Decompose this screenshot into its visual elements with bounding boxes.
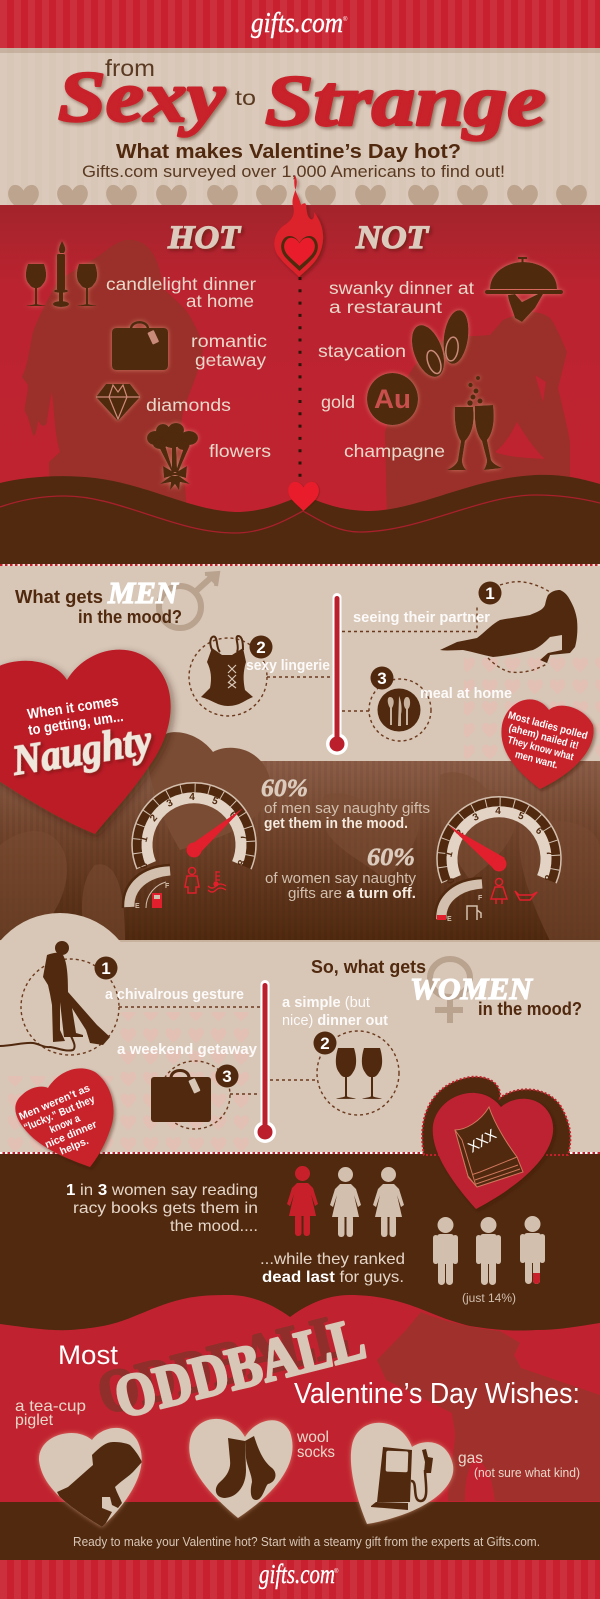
footer logo: ® xyxy=(334,1568,339,1575)
number 3 xyxy=(370,666,394,690)
heading: so what gets: So, what gets xyxy=(311,957,426,977)
pattern hearts xyxy=(464,650,600,761)
heart: socks xyxy=(189,1419,293,1518)
red field xyxy=(0,1295,600,1502)
title xyxy=(58,55,546,141)
icon: flowers xyxy=(147,423,198,490)
note: (not sure what kind) xyxy=(474,1466,580,1480)
title: to xyxy=(235,87,256,110)
small fuel gauge: E xyxy=(135,903,140,910)
icon: slippers xyxy=(406,309,472,381)
heart: piglet xyxy=(39,1428,142,1530)
text: women say: of women say naughty xyxy=(265,870,416,887)
number 3: 3 xyxy=(377,669,387,688)
text: racy books: racy books gets them in xyxy=(73,1200,258,1217)
icon: woman xyxy=(491,878,507,904)
text: men say: of men say naughty gifts xyxy=(264,800,430,817)
icon: man with dog xyxy=(0,941,119,1055)
icon: suitcase xyxy=(151,1061,230,1129)
label: gas xyxy=(458,1450,580,1480)
small fuel gauge: E xyxy=(447,916,452,923)
silhouette: woman profile xyxy=(377,1312,600,1501)
figure: tan woman xyxy=(330,1167,361,1237)
text: the mood: the mood.... xyxy=(170,1218,258,1235)
label: staycation: staycation xyxy=(318,341,406,361)
gauge: women: 2 xyxy=(454,827,466,839)
small fuel gauge xyxy=(435,878,483,923)
needle xyxy=(189,808,243,854)
icon: flame heart xyxy=(274,175,323,277)
callout line 4: nice dinner xyxy=(43,1118,99,1151)
gauge numerals: 0 xyxy=(445,876,458,885)
connector lines xyxy=(119,1007,317,1094)
label: simple dinner: a simple (but xyxy=(282,994,371,1011)
gauge: men: 7 xyxy=(237,833,250,842)
number 1: 1 xyxy=(485,584,495,603)
dotted divider xyxy=(298,277,302,478)
label: tea-cup piglet xyxy=(15,1398,86,1429)
pattern hearts xyxy=(116,1012,252,1153)
row of hearts xyxy=(8,185,587,214)
label: gas: gas xyxy=(458,1450,483,1467)
title: from xyxy=(105,55,155,81)
icon: male symbol xyxy=(159,573,218,628)
text: just 14 percent: (just 14%) xyxy=(462,1293,516,1305)
label: seeing their partner: seeing their partner xyxy=(353,609,490,626)
title: Sexy xyxy=(58,57,226,137)
gauge: men: 2 xyxy=(148,812,160,824)
icon: reclining woman xyxy=(440,590,577,663)
small fuel gauge xyxy=(123,865,170,910)
icon: plate and cutlery xyxy=(369,679,431,741)
subtitle: What makes Valentine’s Day hot? xyxy=(116,141,461,163)
label second line: getaway xyxy=(195,350,266,370)
xxx: XXX xyxy=(465,1126,500,1156)
callout line 5: helps. xyxy=(58,1135,90,1158)
number 1 xyxy=(478,582,502,604)
text: while they ranked: ...while they ranked xyxy=(260,1251,405,1268)
callout line 1: Most ladies polled xyxy=(507,709,589,742)
second line: piglet xyxy=(15,1412,54,1429)
label: gold: gold xyxy=(321,392,355,412)
figure: tan woman xyxy=(373,1167,404,1237)
icon: female symbol xyxy=(430,959,470,1023)
gauge: women: 1 xyxy=(444,850,456,858)
icon: gold: Au xyxy=(374,384,411,414)
number 1 xyxy=(94,956,118,980)
gauge: women: 7 xyxy=(543,849,556,858)
big heart: naughty xyxy=(0,650,171,834)
label: flowers: flowers xyxy=(209,441,271,461)
figure: man xyxy=(476,1217,501,1285)
heading: men: MEN xyxy=(107,575,180,610)
gauge: women xyxy=(435,797,561,923)
label: wool socks xyxy=(296,1429,335,1461)
label: champagne: champagne xyxy=(344,441,445,461)
text: to getting: to getting, um... xyxy=(27,709,125,739)
stitched edge xyxy=(0,1152,600,1154)
heading: valentines day wishes: Valentine’s Day Wishes: xyxy=(294,1378,580,1410)
label: candlelight dinner: candlelight dinner xyxy=(106,274,256,294)
gauge: men: 8 xyxy=(234,859,246,867)
header band with logo: gifts.com xyxy=(251,8,343,39)
header band with logo xyxy=(0,0,600,205)
label: romantic getaway: romantic xyxy=(191,331,267,351)
icon: wine glasses xyxy=(317,1031,399,1115)
heading: in the mood: in the mood? xyxy=(478,999,582,1019)
gauge: men: 5 xyxy=(210,796,220,808)
label: at home: at home xyxy=(186,291,254,311)
icon: champagne xyxy=(447,376,502,470)
label: tea-cup piglet: a tea-cup xyxy=(15,1398,86,1415)
panel: oddball wishes xyxy=(0,1295,600,1560)
header band with logo: ® xyxy=(343,16,348,23)
panel: naughty gauges xyxy=(0,650,600,941)
title: Strange xyxy=(265,61,546,141)
heart: gas pump xyxy=(351,1423,453,1524)
small fuel gauge: F xyxy=(478,895,483,902)
silhouette: man xyxy=(385,312,570,520)
heading: women: WOMEN xyxy=(410,971,534,1006)
icon: cloche xyxy=(485,257,563,322)
callout line 2: “lucky.” But they xyxy=(22,1093,97,1134)
number 3 xyxy=(216,1064,238,1088)
subtitle: Gifts.com surveyed over 1,000 Americans to find out! xyxy=(82,162,505,181)
subtitle xyxy=(82,141,505,181)
stat: men 60 percent: 60% xyxy=(261,775,308,802)
label: wool socks: wool xyxy=(296,1429,329,1446)
needle xyxy=(449,826,505,869)
stat: women 60 percent: 60% xyxy=(367,844,415,871)
thermometer xyxy=(254,980,276,1143)
callout heart: men were not lucky xyxy=(15,1068,114,1167)
text: dead last: dead last for guys. xyxy=(262,1269,404,1286)
label: restaurant: a restaraunt xyxy=(329,297,442,317)
connector lines xyxy=(267,605,477,711)
number 2 xyxy=(250,636,272,658)
gauge numerals: 0 xyxy=(138,861,151,870)
panel: racy books xyxy=(0,1077,600,1343)
label: weekend getaway: a weekend getaway xyxy=(117,1041,258,1058)
footer text: Ready to make your Valentine hot? Start with a steamy gift from the experts at Gifts.com. xyxy=(73,1535,540,1549)
text: when it comes: When it comes xyxy=(26,694,120,723)
background hearts xyxy=(0,732,600,941)
figure: man xyxy=(433,1217,458,1285)
label: sexy lingerie: sexy lingerie xyxy=(246,657,330,674)
callout line 3: know a xyxy=(48,1112,82,1136)
label: meal at home: meal at home xyxy=(420,685,512,702)
icon: gold xyxy=(367,373,418,425)
text: 1 in 3 women: 1 in 3 women say reading xyxy=(66,1182,258,1199)
heading: not: NOT xyxy=(355,220,430,256)
figure: man with red leg xyxy=(520,1216,545,1284)
book heart xyxy=(422,1077,570,1209)
dashed ring 1 xyxy=(488,582,550,672)
callout line 3: They know what xyxy=(506,734,575,763)
gauge: women: 6 xyxy=(533,825,545,837)
gauge: women: 4 xyxy=(495,806,501,817)
number 2: 2 xyxy=(320,1034,330,1053)
gauge: men: 4 xyxy=(189,792,195,803)
heading: most: Most xyxy=(58,1340,119,1370)
heading: hot: HOT xyxy=(167,220,242,256)
figure: red woman xyxy=(287,1166,318,1236)
bottom brown band xyxy=(0,1502,600,1560)
text: get them: get them in the mood. xyxy=(264,815,408,832)
callout line 2: (ahem) nailed it! xyxy=(507,722,580,752)
number 2 xyxy=(314,1032,336,1054)
gauge: men: 1 xyxy=(139,835,151,843)
panel: hot vs not xyxy=(0,175,600,525)
footer logo: gifts.com xyxy=(259,1559,335,1589)
callout line 4: men want. xyxy=(514,748,559,771)
gauge: men: 3 xyxy=(165,797,175,810)
gauge: women: 3 xyxy=(471,811,481,824)
gauge: men xyxy=(123,783,256,910)
number 2: 2 xyxy=(256,638,266,657)
heading: oddball: ODDBALL xyxy=(108,1305,372,1431)
pattern hearts left xyxy=(4,1076,116,1153)
icons: men figures xyxy=(433,1216,545,1285)
silhouette: woman xyxy=(22,240,203,510)
label: chivalrous gesture: a chivalrous gesture xyxy=(105,986,244,1003)
number 3: 3 xyxy=(222,1067,232,1086)
wave divider with heart xyxy=(0,475,600,566)
icon: book xyxy=(455,1107,523,1187)
icon: oil can xyxy=(515,891,537,900)
callout heart: most ladies xyxy=(497,699,594,789)
gauge: women: 8 xyxy=(541,874,553,882)
icon: temperature xyxy=(208,871,226,892)
icon: suitcase xyxy=(112,322,168,370)
panel: what gets men in the mood xyxy=(15,573,600,761)
label: diamonds: diamonds xyxy=(146,395,231,415)
text: naughty: Naughty xyxy=(8,717,155,785)
small fuel gauge: F xyxy=(165,883,170,890)
icon: diamond xyxy=(96,384,140,421)
label: dinner out: nice) dinner out xyxy=(282,1012,388,1029)
panel: what gets women in the mood xyxy=(0,913,600,1153)
heading: what gets men: What gets xyxy=(15,587,103,607)
number 1: 1 xyxy=(101,959,111,978)
label: swanky dinner: swanky dinner at xyxy=(329,278,474,298)
icons: women figures xyxy=(287,1166,404,1237)
icon: candle and wine glasses xyxy=(26,241,97,307)
text: turn off: gifts are a turn off. xyxy=(288,885,416,902)
gauge: men: 6 xyxy=(227,809,239,821)
icon: corset xyxy=(189,636,267,716)
icon: man xyxy=(185,868,199,893)
gauge: women: 5 xyxy=(516,811,526,823)
callout line 1: Men weren’t as xyxy=(17,1082,92,1123)
second line: socks xyxy=(297,1444,335,1461)
thermometer xyxy=(326,593,348,755)
heading: in the mood: in the mood? xyxy=(78,607,182,627)
